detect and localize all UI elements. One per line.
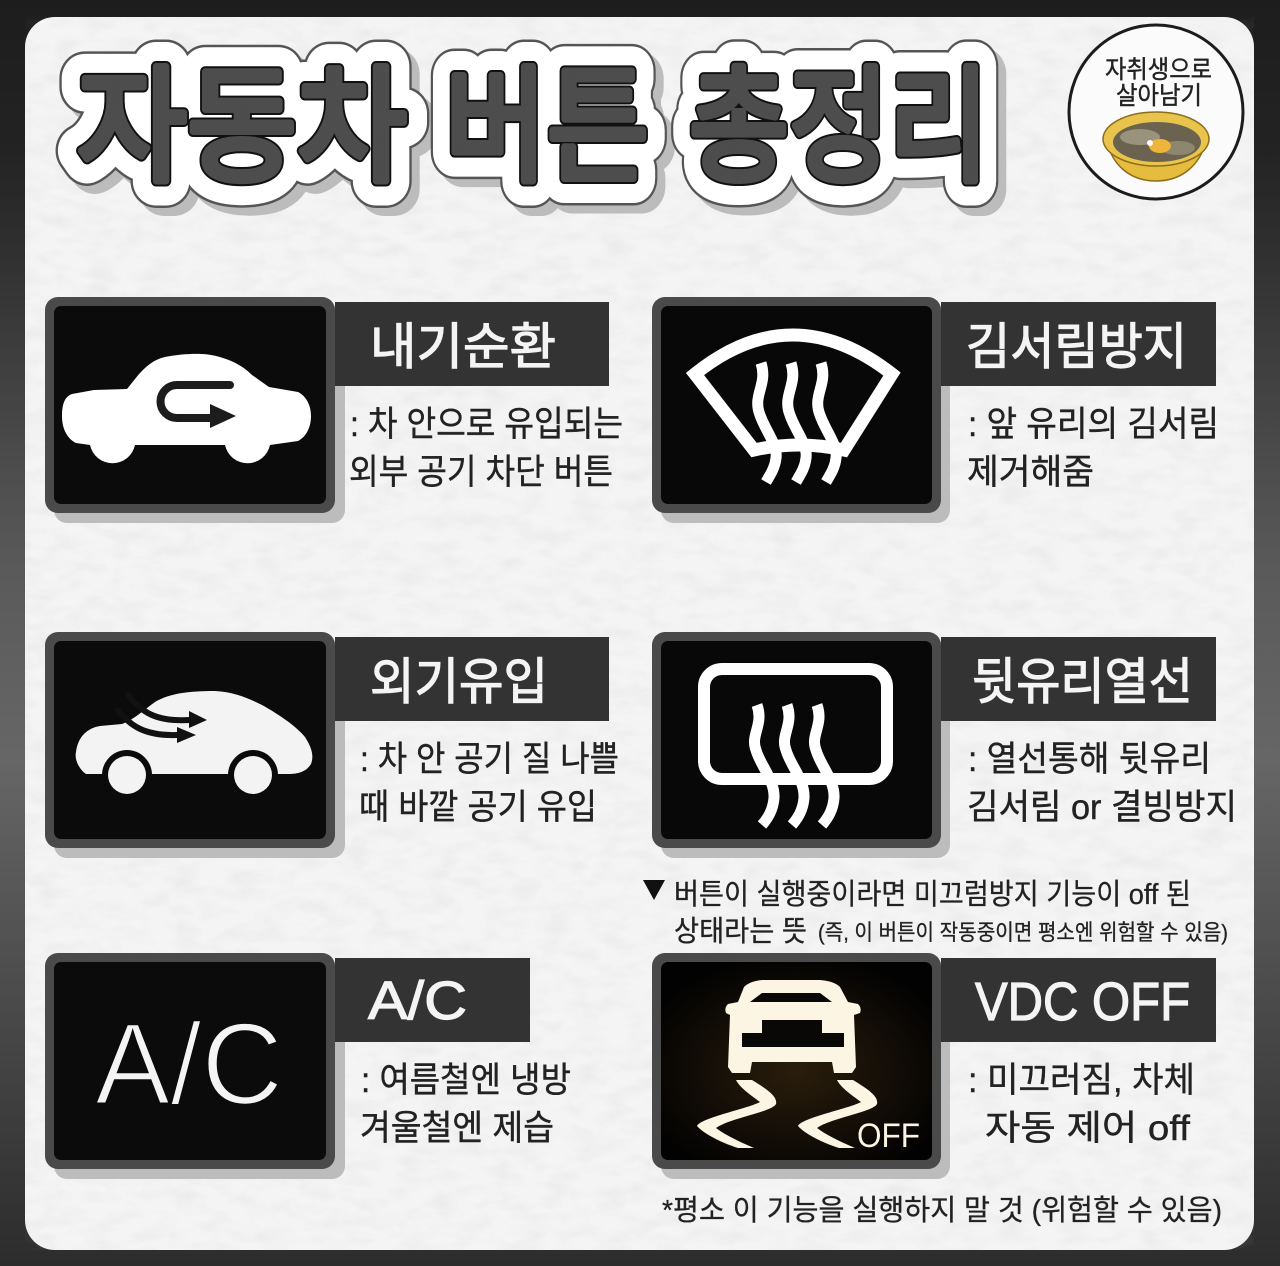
description: 김서림방지 bbox=[967, 405, 1219, 492]
label bar: 내기순환: 내기순환 bbox=[370, 319, 556, 375]
description: 외기유입: : 차 안 공기 질 나쁠 bbox=[360, 740, 619, 779]
description: VDC OFF: : 미끄러짐, 차체 bbox=[968, 1061, 1195, 1100]
button: A/C icon: A/C bbox=[95, 999, 283, 1129]
title: 총정리 bbox=[689, 57, 989, 198]
button: VDC OFF icon bbox=[652, 953, 950, 1179]
title: 총정리 bbox=[689, 57, 989, 198]
title: 자동차 bbox=[85, 65, 415, 206]
description: VDC OFF: 자동 제어 off bbox=[985, 1109, 1190, 1148]
description: 뒷유리열선: : 열선통해 뒷유리 bbox=[968, 740, 1211, 779]
title: 총정리 bbox=[689, 57, 989, 198]
label bar: 외기유입: 외기유입 bbox=[370, 654, 548, 710]
label bar: 김서림방지 bbox=[941, 302, 1216, 386]
label bar: A/C bbox=[335, 958, 530, 1042]
title: 총정리 bbox=[689, 57, 989, 198]
badge: channel logo bbox=[1069, 25, 1243, 199]
title: 버튼 bbox=[445, 57, 649, 198]
label bar: 외기유입 bbox=[335, 637, 609, 721]
title: 버튼 bbox=[453, 65, 657, 206]
footnote: *평소 이 기능을 실행하지 말 것 (위험할 수 있음) bbox=[662, 1194, 1222, 1227]
label bar: VDC OFF bbox=[941, 958, 1216, 1042]
panel: 뒷유리열선 bbox=[652, 632, 1237, 858]
note: VDC warning: (즉, 이 버튼이 작동중이면 평소엔 위험할 수 있음) bbox=[818, 920, 1228, 945]
badge: channel logo: 살아남기 bbox=[1116, 82, 1202, 110]
label bar: A/C: A/C bbox=[368, 971, 467, 1031]
title: 자동차 bbox=[77, 57, 407, 198]
button: rear defrost icon bbox=[652, 632, 950, 858]
title: 자동차 bbox=[77, 57, 407, 198]
description: VDC OFF bbox=[968, 1061, 1195, 1148]
label bar: 김서림방지: 김서림방지 bbox=[966, 319, 1187, 375]
description: 김서림방지: 제거해줌 bbox=[967, 453, 1094, 492]
description: A/C: 겨울철엔 제습 bbox=[360, 1109, 554, 1148]
note: VDC warning: 버튼이 실행중이라면 미끄럼방지 기능이 off 된 bbox=[674, 878, 1191, 911]
button: A/C icon bbox=[45, 953, 345, 1179]
title: 총정리 bbox=[697, 65, 997, 206]
title: 버튼 bbox=[445, 57, 649, 198]
label bar: 뒷유리열선 bbox=[941, 637, 1216, 721]
description: A/C bbox=[360, 1061, 571, 1148]
panel: 외기유입 bbox=[45, 632, 619, 858]
description: 뒷유리열선: 김서림 or 결빙방지 bbox=[967, 788, 1237, 827]
button: fresh air icon bbox=[45, 632, 345, 858]
description: 뒷유리열선 bbox=[967, 740, 1237, 827]
badge: channel logo: 자취생으로 bbox=[1105, 56, 1212, 84]
button: recirculation icon bbox=[45, 297, 345, 523]
title: 자동차 bbox=[77, 57, 407, 198]
button: VDC OFF icon: OFF bbox=[857, 1117, 920, 1155]
title: 버튼 bbox=[445, 57, 649, 198]
title bbox=[77, 57, 997, 206]
panel: VDC OFF bbox=[652, 953, 1216, 1179]
description: A/C: : 여름철엔 냉방 bbox=[361, 1061, 571, 1100]
panel: A/C bbox=[45, 953, 571, 1179]
note: VDC warning bbox=[643, 878, 1228, 948]
description: 외기유입: 때 바깥 공기 유입 bbox=[359, 788, 597, 827]
note: VDC warning: 상태라는 뜻 bbox=[674, 916, 807, 948]
description: 내기순환 bbox=[349, 405, 623, 492]
panel: 내기순환 bbox=[45, 297, 623, 523]
panel: 김서림방지 bbox=[652, 297, 1219, 523]
description: 내기순환: : 차 안으로 유입되는 bbox=[350, 405, 623, 444]
label bar: VDC OFF: VDC OFF bbox=[975, 972, 1190, 1032]
description: 김서림방지: : 앞 유리의 김서림 bbox=[968, 405, 1219, 444]
title: 자동차 bbox=[77, 57, 407, 198]
description: 내기순환: 외부 공기 차단 버튼 bbox=[349, 453, 613, 492]
description: 외기유입 bbox=[359, 740, 619, 827]
button: front defrost icon bbox=[652, 297, 950, 523]
label bar: 내기순환 bbox=[335, 302, 609, 386]
label bar: 뒷유리열선: 뒷유리열선 bbox=[972, 654, 1193, 710]
title: 버튼 bbox=[445, 57, 649, 198]
